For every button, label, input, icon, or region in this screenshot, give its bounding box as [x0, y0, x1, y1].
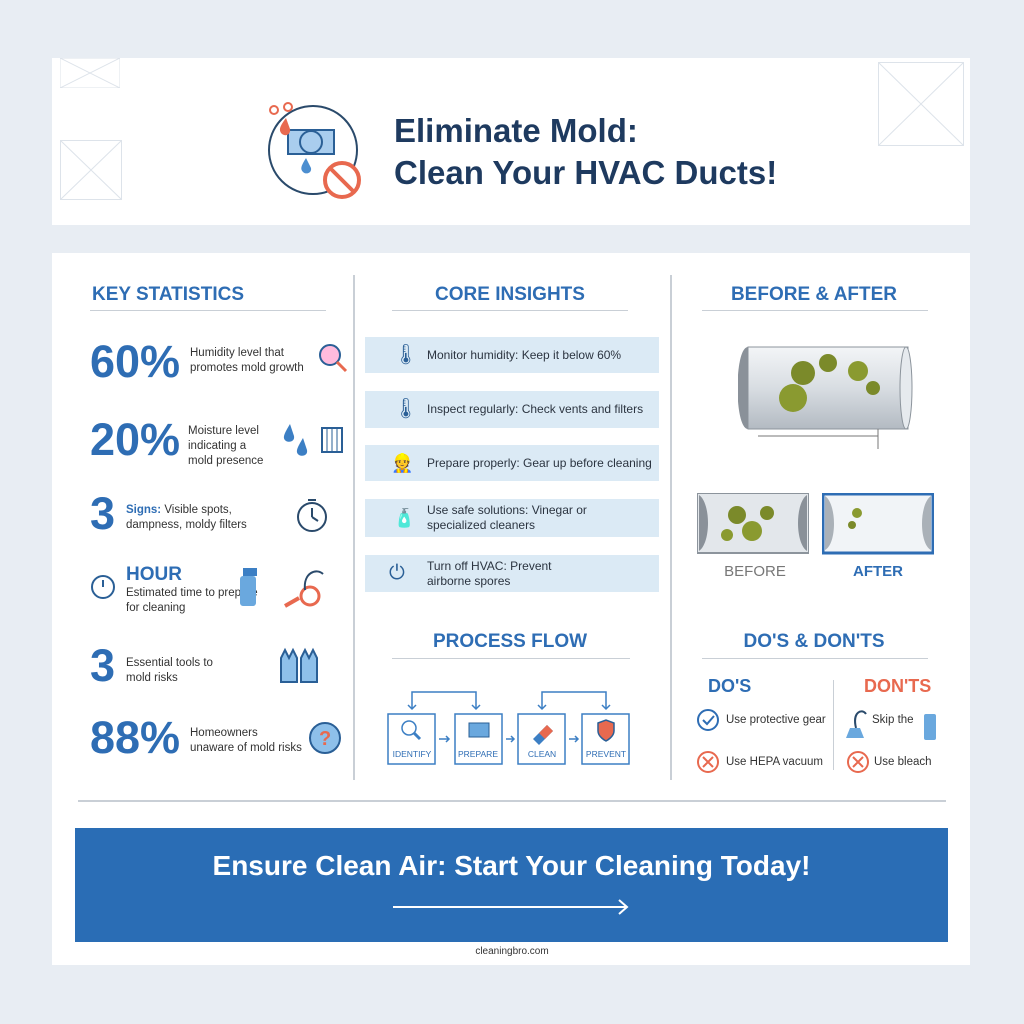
after image: AFTER [853, 563, 903, 580]
title: Eliminate Mold: [394, 112, 638, 149]
don'ts column [846, 676, 936, 773]
stat 20%: 20% [90, 414, 180, 465]
stat 20%: Moisture level [188, 425, 259, 437]
stat 3 signs: dampness, moldy filters [126, 519, 247, 531]
stat 3 essential [90, 640, 318, 691]
insight 2: Inspect regularly: Check vents and filters [427, 402, 643, 416]
panel: key statistics [90, 284, 347, 763]
insight 1 [365, 337, 659, 373]
title: Clean Your HVAC Ducts! [394, 154, 777, 191]
insight 3: Prepare properly: Gear up before cleaning [427, 456, 652, 470]
after image [822, 493, 934, 580]
stat 3 signs: Signs: Visible spots, [126, 504, 232, 516]
do's column [697, 676, 826, 773]
insight 4 [365, 499, 659, 537]
stat 20%: mold presence [188, 455, 263, 467]
stat 88% [90, 712, 341, 763]
don'ts column: Skip the [872, 714, 914, 726]
process flow diagram: CLEAN [528, 749, 556, 759]
process flow diagram: PREPARE [458, 749, 498, 759]
insight 5: airborne spores [427, 574, 510, 588]
stat 3 signs [90, 488, 327, 539]
insight 5: Turn off HVAC: Prevent [427, 558, 552, 572]
process flow diagram [387, 691, 630, 765]
stat 60%: Humidity level that [190, 347, 284, 359]
heading: process flow: PROCESS FLOW [433, 631, 587, 652]
don'ts column: DON'TS [864, 676, 931, 696]
title [394, 112, 777, 191]
insight 4: Use safe solutions: Vinegar or [427, 503, 587, 517]
stat 88%: ? [319, 728, 331, 750]
big duct illustration [738, 346, 912, 449]
heading: key statistics: KEY STATISTICS [92, 284, 244, 305]
stat 88%: unaware of mold risks [190, 742, 302, 754]
stat 88%: Homeowners [190, 727, 258, 739]
stat 88%: 88% [90, 712, 180, 763]
stat 3 essential: 3 [90, 640, 115, 691]
insight 2: 🌡 [393, 398, 418, 420]
stat 3 signs: 3 [90, 488, 115, 539]
main panel [52, 253, 970, 965]
insight 2 [365, 391, 659, 428]
insight 4: 🧴 [393, 508, 415, 528]
insight 1: 🌡 [393, 344, 418, 366]
stat 60%: 60% [90, 336, 180, 387]
call to action banner: Ensure Clean Air: Start Your Cleaning Today! [213, 850, 810, 881]
insight 5 [365, 555, 659, 592]
stat hour: for cleaning [126, 602, 185, 614]
before image [697, 493, 809, 580]
stat 3 essential: mold risks [126, 672, 178, 684]
icon: duct with mold [268, 102, 361, 199]
stat 3 essential: Essential tools to [126, 657, 213, 669]
don'ts column: Use bleach [874, 756, 932, 768]
heading: core insights: CORE INSIGHTS [435, 284, 585, 305]
stat 20%: indicating a [188, 440, 246, 452]
insight 3 [365, 445, 659, 481]
insight 3: 👷 [391, 452, 413, 472]
stat hour: HOUR [126, 564, 182, 585]
insight 1: Monitor humidity: Keep it below 60% [427, 348, 621, 362]
call to action banner [75, 828, 948, 942]
process flow diagram: PREVENT [586, 749, 626, 759]
stat 20% [90, 414, 343, 467]
heading: before & after: BEFORE & AFTER [731, 284, 897, 305]
do's column: DO'S [708, 676, 751, 696]
do's column: Use HEPA vacuum [726, 756, 823, 768]
stat 60% [90, 336, 347, 387]
header panel [52, 58, 970, 225]
process flow diagram: IDENTIFY [393, 749, 432, 759]
heading: do's & don'ts: DO'S & DON'TS [744, 631, 884, 652]
stat hour: Estimated time to prepare [126, 587, 258, 599]
before image: BEFORE [724, 563, 786, 580]
insight 4: specialized cleaners [427, 518, 535, 532]
footer url: cleaningbro.com [475, 946, 549, 957]
insight 5: ⏻ [389, 562, 405, 584]
stat hour [91, 564, 324, 614]
do's column: Use protective gear [726, 714, 826, 726]
stat 60%: promotes mold growth [190, 362, 304, 374]
